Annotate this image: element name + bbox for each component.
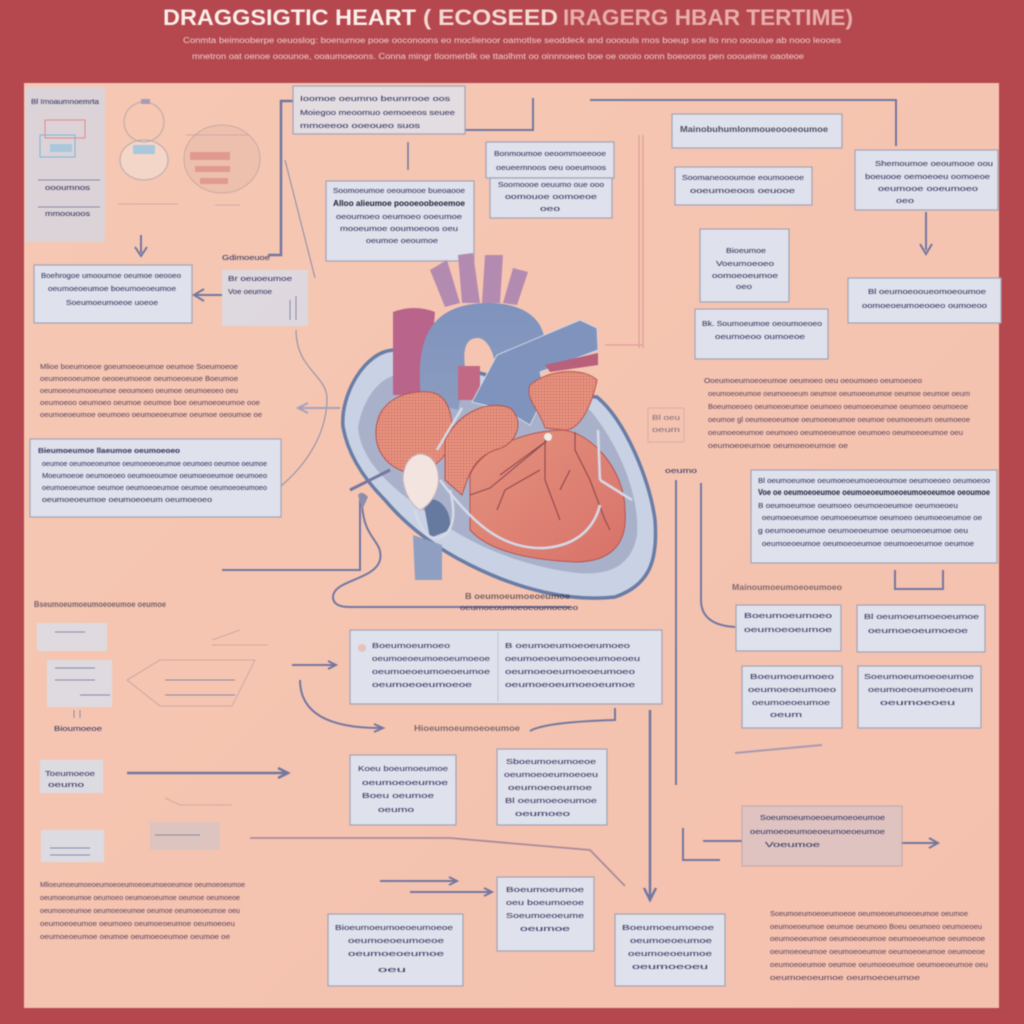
box: lower centre left: oeumoeoeumoe [362, 778, 448, 787]
box: lower centre right: Bl oeumoeoeumoe [505, 796, 597, 805]
box: upper middle: Soomoooe oeuumo oue ooo [498, 180, 604, 189]
text block: lower right paragraph: oeumoeoeumoe oeumoeoeumoe [770, 973, 920, 982]
box: far right second [848, 278, 1001, 323]
box: right row 1 left: Boeumoeumoeo [744, 611, 832, 620]
box: top right header: Mainobuhumlonmoueoooeoumoe [680, 125, 829, 134]
box: middle right third [695, 309, 828, 359]
box: translucent right diagram card: oeumoeoeumoeoeumoeoeumoe [750, 827, 885, 836]
caption under heart [460, 592, 578, 612]
text block: lower right paragraph [770, 909, 988, 982]
box: right large callout: oeumoeoeumoe oeumoeoeumoe oeumoeo oeumoeoeumoe oe [762, 513, 982, 522]
text block: left paragraph [40, 362, 262, 419]
box: translucent right diagram card: Soeumoeumoeoeumoeoeumoe [760, 813, 885, 822]
panel: reference sheet top left [25, 87, 105, 242]
box: far right second: oomoeoeumoeooeo oumoeoo [862, 301, 987, 310]
box: upper middle: oeueemnoos oeu ooeumoos [496, 163, 606, 172]
box: left large callout [30, 439, 281, 517]
box: lower centre right: oeumoeo [515, 809, 570, 818]
box: upper middle: Bonmoumoe oeoommoeeooe [494, 149, 606, 158]
box: wide centre callout: oeumoeoeumoeoe [372, 680, 472, 689]
lead junction [350, 470, 390, 490]
small cluster near heart right: oeum [652, 425, 680, 434]
text block: left paragraph: Mlioe boeumoeoe goeumoeoeumoe oeumoe Soeumoeoe [40, 362, 238, 371]
box: centre callout with bold line: mooeumoe ooumoeoos oeu [340, 224, 458, 233]
left diagram: small cards: oeumo [48, 780, 84, 789]
box: centre right small: oeo [736, 282, 752, 291]
box: lower centre right [497, 749, 607, 825]
small cluster near heart right [648, 408, 697, 475]
box: top centre note: Ioomoe oeumno beunrrooe oos [300, 94, 450, 103]
box: bottom right [615, 914, 725, 986]
box: middle right third: oeumoeoo oumoeoe [715, 332, 805, 341]
label above right boxes: Mainoumoeumoeoeumoeo [732, 583, 842, 592]
box: upper right small [675, 167, 812, 205]
box: left upper: oeumoeoeumoe boeumoeoeumoe [48, 284, 176, 293]
pink ascending vessel [393, 308, 435, 395]
blue arch [420, 303, 545, 410]
box: right large callout [751, 470, 997, 563]
text block: right paragraph: oeumoeoeumoe oeumoeo oeumoeoeumoe oeumoeo oeumoeoeumoe oeu [708, 428, 963, 437]
box: bottom right: oeumoeoeumoe [628, 949, 712, 958]
box: bottom centre small: Boeumoeumoe [506, 885, 584, 894]
box: wide centre callout: Boeumoeumoeo [372, 641, 450, 650]
icon: sketch of heart cross section [120, 99, 168, 180]
box: right large callout: Bl oeumoeumoe oeumoeoeumoeoeoumoe oeumoeoeo oeumoeoo [758, 476, 990, 485]
box: left large callout: oeumoe oeumoeoeumoe oeumoeoeoeumoe oeumoeo oeumoe oeumoe [42, 459, 267, 468]
small cluster near heart right: oeumo [665, 466, 697, 475]
title: IRAGERG HBAR TERTIME) [563, 5, 853, 30]
box: left small diagram card: Br oeuoeumoe [228, 274, 292, 283]
left lobe [445, 405, 518, 495]
box: bottom right: Boeumoeumoeoe [622, 923, 714, 932]
box: right row 2 left: oeumoeoeumoe [752, 698, 830, 707]
box: far right note: Shemoumoe oeoumooe oou [875, 159, 993, 168]
left diagram: scanner sketch with caption: Bioumoeoe [54, 724, 102, 733]
box: centre right small: Voeumoeoeo [716, 259, 774, 268]
box: left large callout: Bieumoeumoe llaeumoe oeumoeoeo [38, 446, 180, 455]
box: bottom right: oeumoeoeu [632, 962, 708, 971]
caption under heart: oeumoeoumoeoeoumoeoeo [460, 603, 578, 612]
text block: lower left paragraph: Mlioeumoeumoeoeumoeoeumoeoeumoeoeumoe oeumoeoeumoe [40, 880, 245, 889]
box: wide centre callout [350, 630, 662, 704]
text block: lower right paragraph: oeumoeoeumoe oeumoe oeumoeoeumoe oeumoeoeumoe oeu [770, 960, 988, 969]
text block: left paragraph: oeumoeoo oeumoeo oeumoe oeumoe boe oeumoeoeumoe ooe [40, 398, 260, 407]
box: right row 1 right [857, 605, 985, 652]
box: left small diagram card: Gdimoeuoe [222, 253, 270, 262]
box: lower centre left: Boeu oeumoe [362, 791, 434, 800]
text block: left paragraph: oeumoeoeumooeumoe oeoumoeo oeumoe oeumoeoeo oeu [40, 386, 238, 395]
box: far right note: oeumooe ooeumoeo [878, 184, 978, 193]
box: bottom centre small: Soeumoeoeume [506, 911, 584, 920]
lower dark chamber [423, 499, 450, 538]
box: right row 2 right: Soeumoeumoeoeumoe [864, 672, 974, 681]
box: left upper [34, 265, 192, 323]
text block: lower right paragraph: Soeumoeumoeoeumoeoe oeumoeoeumoeoeumoe oeumoe [770, 909, 968, 918]
box: right large callout: oeumoeoeumoe oeumoeoeumoe oeumoeoeumoe oeumoe [762, 539, 974, 548]
left clip [358, 493, 368, 510]
icon: sketch of layered tissue [118, 125, 260, 205]
box: left small diagram card: Voe oeumoe [228, 287, 272, 296]
text block: lower right paragraph: oeumoeoeumoe oeumoeoeumoe oeumoeoeumoe oeumoeoe [770, 934, 985, 943]
text block: lower left paragraph: oeumoeoeumoe oeumoeo oeumoeoeumoe oeumoeoeu [40, 919, 235, 928]
outer pericardium shell [343, 350, 656, 598]
box: centre callout with bold line: oeumoe oeoumoe [366, 236, 438, 245]
box: top centre note: Moiegoo meoomuo oemoeeos seuee [300, 108, 455, 117]
left diagram: small cards [40, 760, 232, 862]
box: middle right third: Bk. Soumoeumoe oeoumoeoeo [702, 319, 822, 328]
box: centre right small: Bioeumoe [726, 246, 766, 255]
text block: lower right paragraph: oeumoeoeumoe oeumoeoeumoe oeumoeoeumoe oeumoeoe [770, 947, 985, 956]
title: ( ECOSEED [423, 5, 558, 30]
box: wide centre callout: oeumoeoeumoeoeumoe [372, 667, 490, 676]
box: lower centre left [350, 755, 456, 825]
text block: right paragraph: Ooeumoeumoeoeumoe oeumoeo oeu oeoumoeo oeumoeoeo [704, 376, 922, 385]
box: left small diagram card [222, 253, 308, 326]
box: centre right small [700, 229, 789, 302]
caption under heart: B oeumoeumoeoeumoe [465, 592, 571, 601]
panel: reference sheet top left: mmoouoos [45, 209, 90, 218]
box: right row 2 left [742, 666, 842, 728]
valve dot [544, 433, 552, 441]
subtitle: Conmta beimooberpe oeuoslog: boenumoe pooe ooconoons eo moclienoor oamotlse seoddeck and oooouls mos boeup soe lio nno ooouiue ab nooo leooes [183, 36, 841, 45]
connector lines [127, 98, 943, 900]
box: lower centre right: oeumoeoeumoeoeu [504, 770, 598, 779]
subtitle [183, 36, 841, 61]
box: centre right small: oomoeoeumoe [712, 271, 778, 280]
box: top centre note: mmoeeoo ooeoueo suos [300, 121, 420, 130]
box: bottom centre small [497, 877, 594, 951]
box: bottom left: oeu [378, 965, 406, 974]
box: right row 1 left [736, 605, 841, 651]
box: right row 2 right: oeumoeoeu [880, 698, 955, 707]
box: right large callout: B oeumoeumoe oeumoeo oeumoeoeumoe oeumoeoeu [758, 501, 958, 510]
title [163, 5, 853, 30]
box: right row 2 left: oeum [770, 710, 802, 719]
text block: right paragraph: oeumoeoeumoe oeumoeoeum oeumoe oeumoeoeumoe oeumoe oeumoe oeum [708, 389, 970, 398]
purple vessels [430, 253, 528, 307]
left diagram: scanner sketch with caption: Bseumoeumoeumoeoeumoe oeumoe [34, 600, 167, 609]
box: far right note: boeuooe oemoeoeu oomoeoe [865, 172, 990, 181]
text block: right paragraph: oeumoe gl oeumoeoeumoe oeumoeoeumoe oeumoe oeumoeoeum oeumoeoe [708, 415, 970, 424]
pink strip [545, 353, 598, 372]
box: right row 1 right: Bl oeumoeumoeoeumoe [864, 612, 979, 621]
white catheter bands [415, 408, 632, 548]
box: upper middle [486, 142, 614, 218]
box: centre callout with bold line: Alloo alieumoe poooeoobeoemoe [333, 199, 466, 208]
left diagram: small cards: Toeumoeoe [45, 769, 95, 778]
box: bottom left: oeumoeoeumoe [348, 949, 444, 958]
text block: left paragraph: oeumoeoeumoe oeumoeo oeumoeoeumoe oeumoe oeoumoe oe [40, 410, 262, 419]
box: upper middle: oomouoe oomoeoe [505, 192, 597, 201]
box: centre callout with bold line: Soomoeumoe oeoumooe bueoaooe [333, 186, 465, 195]
text block: lower left paragraph: oeumoeoeumoe oeumoe oeumoeoeumoe oeumoe oe [40, 932, 230, 941]
box: translucent right diagram card: Voeumoe [765, 840, 820, 849]
text block: left paragraph: oeumoeooeumoe oeooeumoeoe oeumoeoeuoe Boeumoe [40, 374, 238, 383]
upper auricle [529, 372, 597, 430]
box: upper right small: ooeumoeoos oeuooe [690, 186, 795, 195]
box: left large callout: Moeumoeoe oeumoeoeo oeumoeoumoe oeumoeoeumoe oeumoeo [42, 471, 267, 480]
box: centre callout with bold line: oeoumoeo oeumoeo ooeumoe [336, 212, 462, 221]
box: bottom left: oeumoeoeumoeoe [348, 936, 444, 945]
box: left upper: Soeumoeumoeoe uoeoe [66, 298, 158, 307]
box: wide centre callout: B oeumoeumoeoeumoeo [505, 641, 630, 650]
box: wide centre callout: oeumoeoeumoeoeumoeo [505, 667, 635, 676]
box: right row 1 right: oeumoeoeumoeoe [868, 626, 968, 635]
text block: lower left paragraph [40, 880, 245, 941]
box: upper middle: oeo [540, 204, 560, 213]
main ventricle [470, 430, 625, 562]
box: far right second: Bl oeumoeooueomoeoumoe [868, 287, 986, 296]
box: far right note [855, 150, 998, 210]
box: upper right small: Soomaneoooumoe eoumooeoe [682, 173, 804, 182]
box: bottom centre small: oeu boeumoeoe [506, 898, 584, 907]
box: lower centre right: Sboeumoeumoeoe [506, 757, 596, 766]
box: lower centre right: oeumoeoeumoe [508, 783, 592, 792]
panel: reference sheet top left: Bl Imoaumnoemrta [31, 97, 100, 106]
coronary veins [470, 432, 610, 530]
box: top centre note [293, 86, 465, 134]
white balloon [403, 454, 438, 510]
box: right row 2 left: Boeumoeumoeo [750, 672, 834, 681]
subtitle: mnetron oat oenoe ooounoe, ooaumoeoons. Conna mingr tloomerblk oe ttaolhmt oo oinnnoeeo boe oe oooio oonn boeooros pen oooueime oaoteoe [192, 52, 805, 61]
left diagram: scanner sketch with caption [34, 600, 268, 733]
box: right row 2 left: oeumoeoeumoeo [748, 685, 836, 694]
box: bottom left [328, 914, 463, 986]
box: wide centre callout: oeumoeoeumoeoeumoeoeu [505, 654, 640, 663]
descending vessel [413, 535, 442, 580]
text block: lower right paragraph: oeumoeoeumoe oeumoe oeumoeo Boeu oeumoeo oeumoeoeu [770, 922, 982, 931]
box: centre callout with bold line [326, 181, 474, 261]
box: far right note: oeo [896, 196, 914, 205]
box: wide centre callout: oeumoeoeumoeoeumoe [505, 680, 635, 689]
box: wide centre callout: oeumoeoeumoeoeumoeoe [372, 654, 490, 663]
box: right large callout: Voe oe oeumoeoeumoe oeumoeoeumoeoeumoeoeumoe oeoumoe [758, 488, 990, 497]
small cluster near heart right: Bl oeu [652, 413, 680, 422]
box: lower centre left: oeumo [378, 805, 414, 814]
box: top right header [672, 114, 842, 148]
text block: right paragraph [704, 376, 970, 450]
text block: lower left paragraph: oeumoeoeumoe oeumoeoeumoe oeumoe oeumoeoeumoe oeu [40, 906, 240, 915]
box: left large callout: oeumoeoeumoe oeumoeoeum oeumoeoeo [42, 495, 212, 504]
heart illustration [343, 253, 656, 598]
blue pulmonary trunk [472, 320, 598, 425]
label below wide callout: Hioeumoeumoeoeumoe [414, 724, 521, 733]
text block: right paragraph: oeumoeoeumoe oeumoeoeumoe oe [708, 441, 848, 450]
box: right row 2 right: oeumoeoeumoeoeum [868, 685, 973, 694]
box: right row 1 left: oeumoeoeumoe [744, 625, 832, 634]
text block: lower left paragraph: oeumoeoeumoe oeumoeo oeumoeoeumoe oeumoe oeumoeoe [40, 893, 240, 902]
small pink vessel under arch [458, 366, 480, 400]
panel: reference sheet top left: oooumnos [45, 183, 90, 192]
text block: right paragraph: Boeumoeoeo oeumoeoeumoe oeumoeo oeumoeoeumoe oeumoeo oeumoeoe [708, 402, 968, 411]
inner shell shading [358, 375, 637, 573]
box: right large callout: g oeumoeoeumoe oeumoeoeumoe oeumoeoeumoe oeu [758, 526, 968, 535]
box: bottom centre small: oeumoe [520, 924, 570, 933]
right atrium [376, 392, 452, 473]
box: left large callout: oeumoeoeumoe oeumoe oeumoeoeumoe oeumoe oeumoeoeumoeo [42, 483, 267, 492]
title: DRAGGSIGTIC HEART [163, 5, 417, 30]
box: right row 2 right [858, 666, 981, 728]
box: lower centre left: Koeu boeumoeumoe [358, 764, 448, 773]
box: bottom right: oeumoeoeumoe [630, 936, 712, 945]
box: left upper: Boehrogoe umooumoe oeumoe oeooeo [41, 271, 181, 280]
box: bottom left: Bioeumoeumoeoeumoeoe [335, 923, 453, 932]
box: translucent right diagram card [742, 806, 902, 866]
